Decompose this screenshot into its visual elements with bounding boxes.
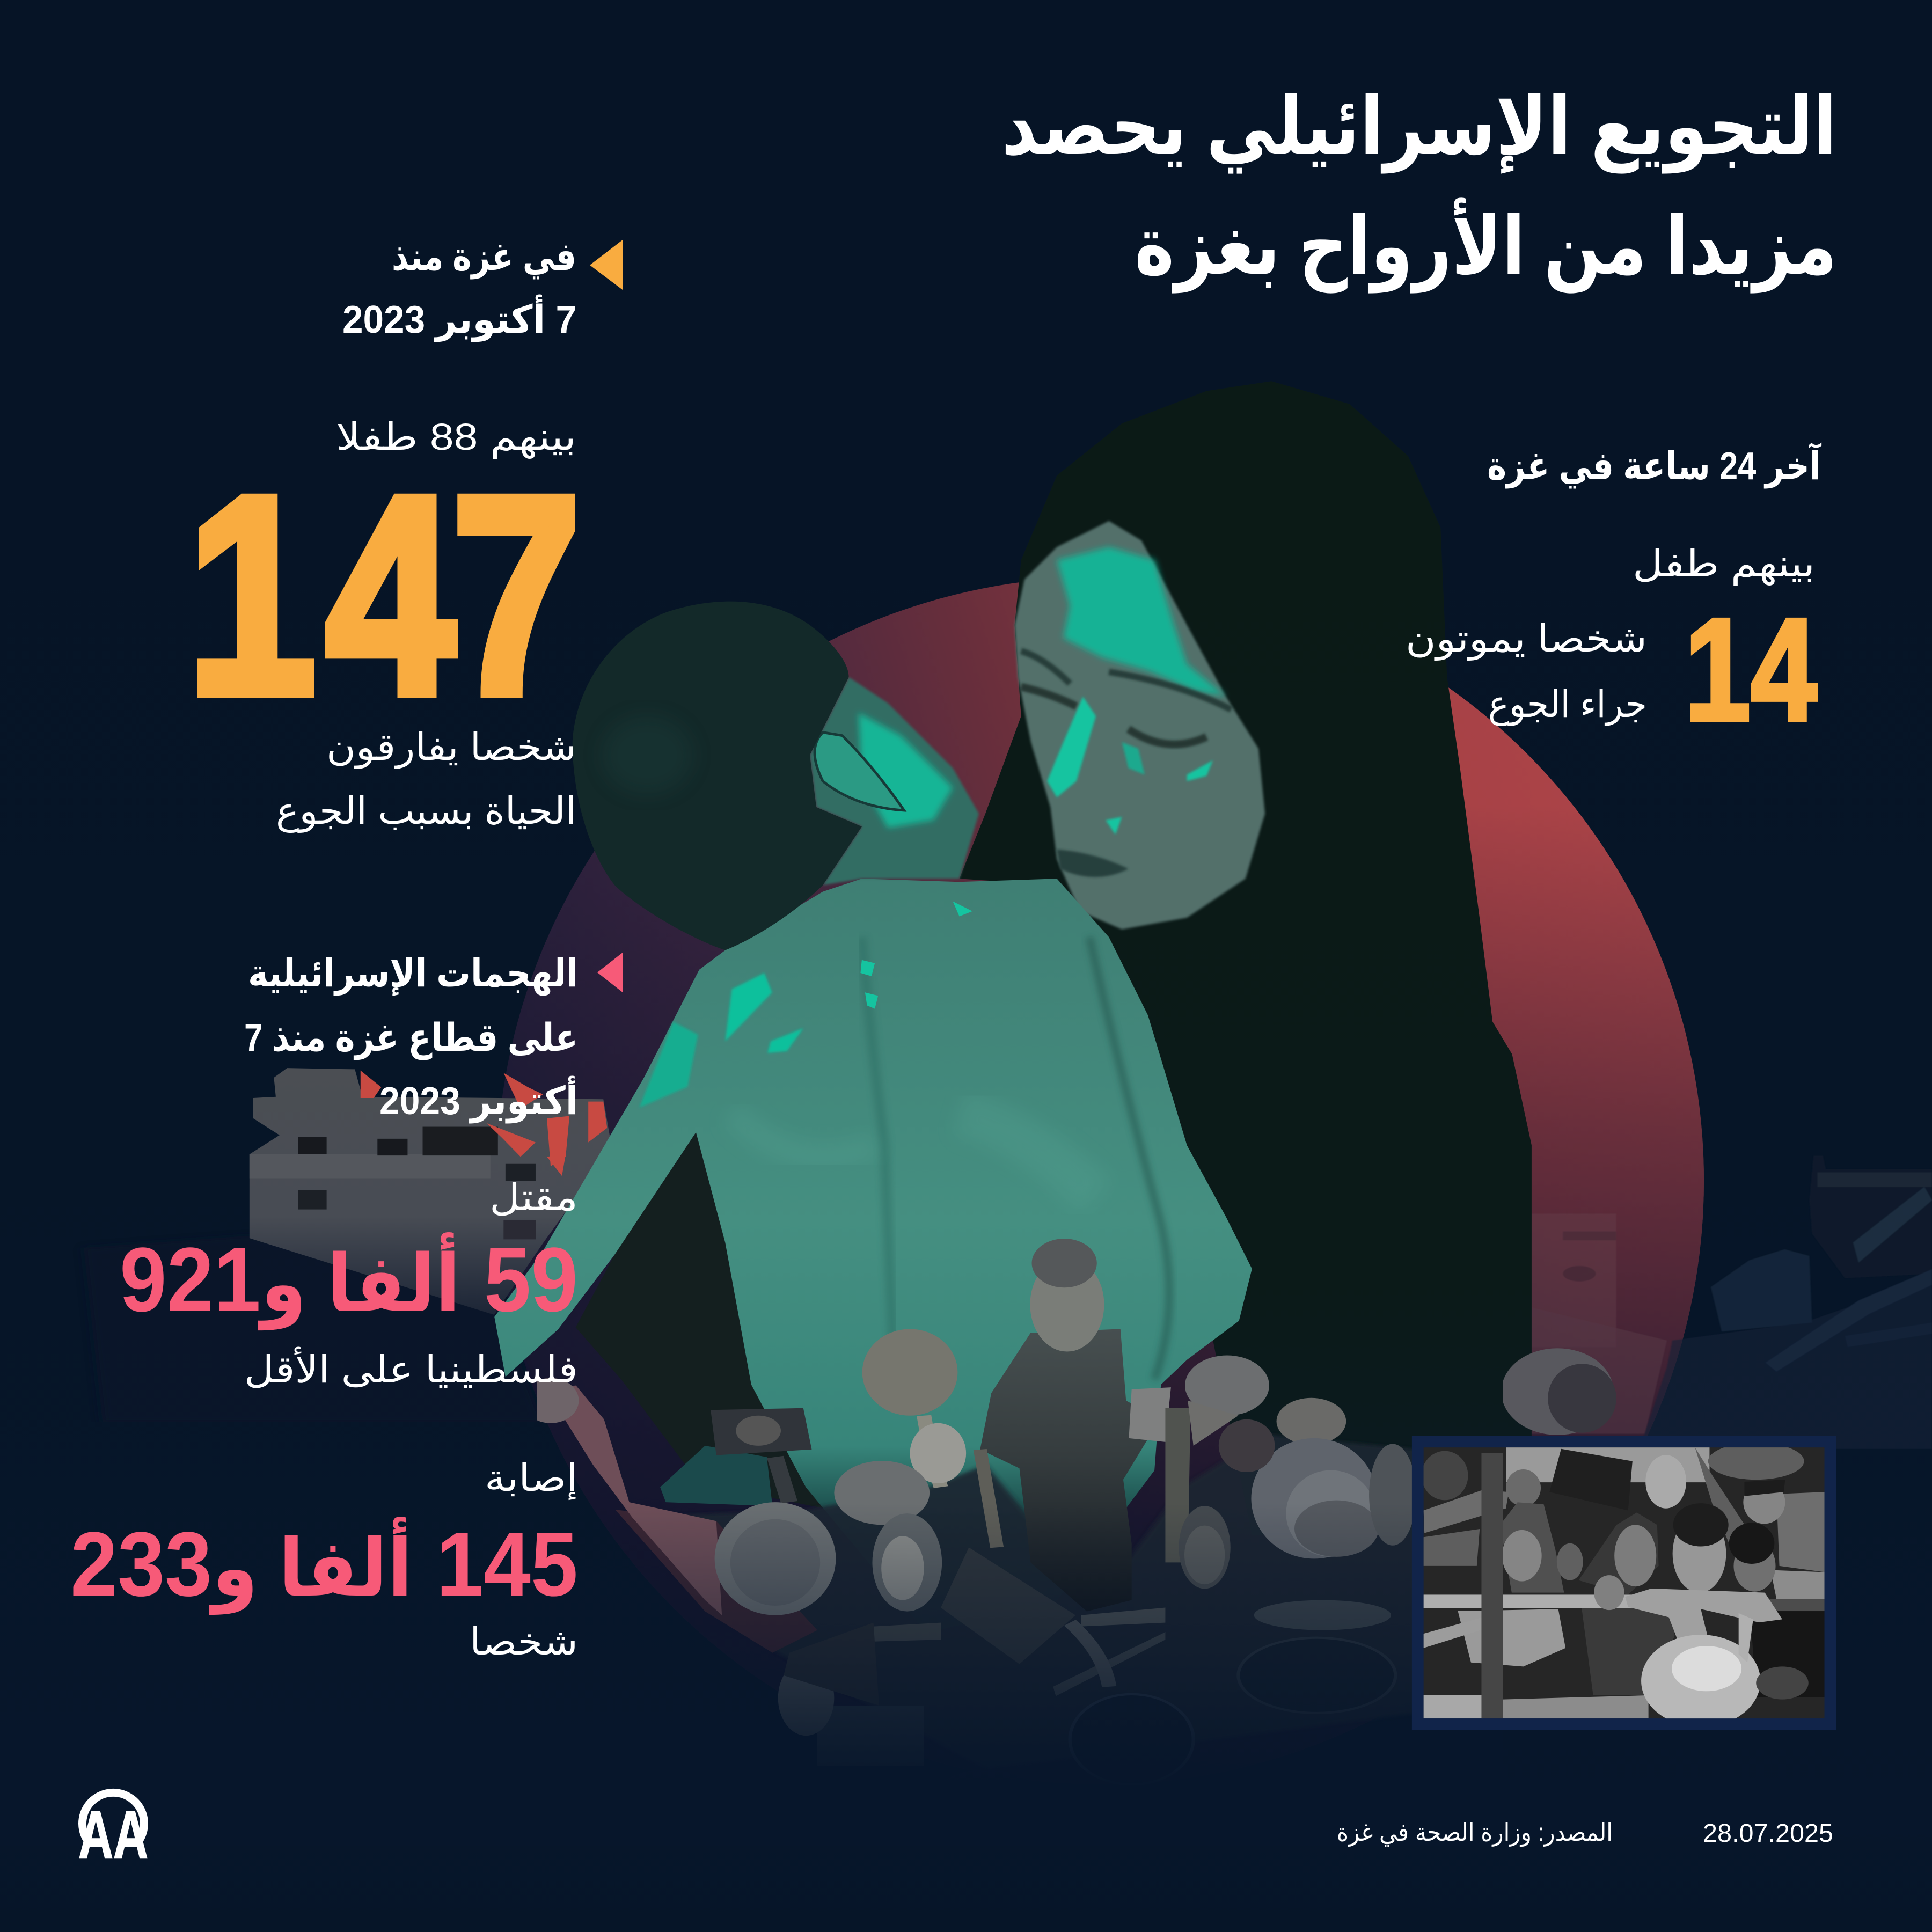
icon: orange triangle <box>590 240 623 290</box>
stat: killed: فلسطينيا على الأقل <box>244 1346 578 1391</box>
stat: 147 deaths from hunger: 147 <box>187 438 581 752</box>
stat: killed: 59 ألفا و921 <box>120 1229 578 1331</box>
stat: 147 deaths from hunger: شخصا يفارقون <box>326 726 576 769</box>
photo frame <box>1412 1436 1836 1730</box>
date: 28.07.2025 <box>1703 1819 1833 1848</box>
icon: pink triangle <box>597 953 623 992</box>
main title <box>1001 81 1837 294</box>
child's body <box>494 879 1252 1633</box>
bottom fade overlay <box>0 1503 1503 1846</box>
building body <box>250 1068 611 1315</box>
source line: المصدر: وزارة الصحة في غزة <box>1337 1818 1613 1847</box>
stat: killed: مقتل <box>489 1176 578 1218</box>
red circle backdrop <box>496 577 1704 1784</box>
stat: injured: إصابة <box>485 1457 578 1501</box>
stat: injured: شخصا <box>470 1621 578 1663</box>
ghost building inside circle, right <box>1532 1156 1932 1449</box>
right block: last 24 hours: آخر 24 ساعة في غزة <box>1487 442 1822 489</box>
faint ruins under building <box>84 1236 543 1422</box>
child's dark hair <box>573 602 862 950</box>
debris and ruins, right <box>1640 1156 1932 1449</box>
left heading: in Gaza since 7 October 2023: في غزة منذ <box>392 236 576 280</box>
teal shape behind pots <box>660 1446 772 1506</box>
stat: injured <box>70 1457 578 1663</box>
left heading: in Gaza since 7 October 2023: 7 أكتوبر 2023 <box>342 294 576 342</box>
boy with pot <box>980 1239 1160 1612</box>
stat: 147 deaths from hunger: الحياة بسبب الجوع <box>276 790 576 833</box>
mother's cloth behind child <box>576 1132 829 1510</box>
right block: last 24 hours: 14 <box>1685 588 1817 751</box>
left heading: Israeli attacks on Gaza <box>244 952 623 1124</box>
mother's black hijab <box>960 381 1532 1535</box>
stat: killed <box>120 1176 578 1391</box>
child's neck and face <box>810 677 979 885</box>
logo: Anadolu Agency <box>78 1792 148 1872</box>
crowd with pots <box>537 1239 1412 1736</box>
stat: 147 deaths from hunger: بينهم 88 طفلا <box>336 416 576 459</box>
left heading: Israeli attacks on Gaza: الهجمات الإسرائيلية <box>248 952 578 996</box>
inset photo with frame <box>1411 1436 1836 1730</box>
mother's face <box>1015 521 1265 930</box>
right block: last 24 hours <box>1406 442 1822 751</box>
left heading: Israeli attacks on Gaza: أكتوبر 2023 <box>379 1075 578 1124</box>
right block: last 24 hours: جراء الجوع <box>1488 683 1647 726</box>
figure: mother and child <box>494 381 1532 1633</box>
photo of crowd at barrier <box>1422 1443 1825 1727</box>
dark crowd mass <box>632 1435 1417 1769</box>
stat: injured: 145 ألفا و233 <box>70 1513 578 1615</box>
pots and pans <box>711 1329 1416 1822</box>
left heading: in Gaza since 7 October 2023 <box>342 236 623 342</box>
reddish tint along circle edge <box>615 1510 817 1653</box>
right block: last 24 hours: شخصا يموتون <box>1406 618 1647 661</box>
pink arm with lid <box>523 1378 722 1615</box>
woman in scarf <box>784 1513 942 1706</box>
left heading: Israeli attacks on Gaza: على قطاع غزة منذ 7 <box>244 1016 578 1060</box>
top-right pot <box>1503 1348 1616 1435</box>
right block: last 24 hours: بينهم طفل <box>1633 543 1815 586</box>
ghost building shapes <box>1530 1213 1667 1434</box>
logo: Anadolu Agency: AA <box>78 1797 148 1872</box>
